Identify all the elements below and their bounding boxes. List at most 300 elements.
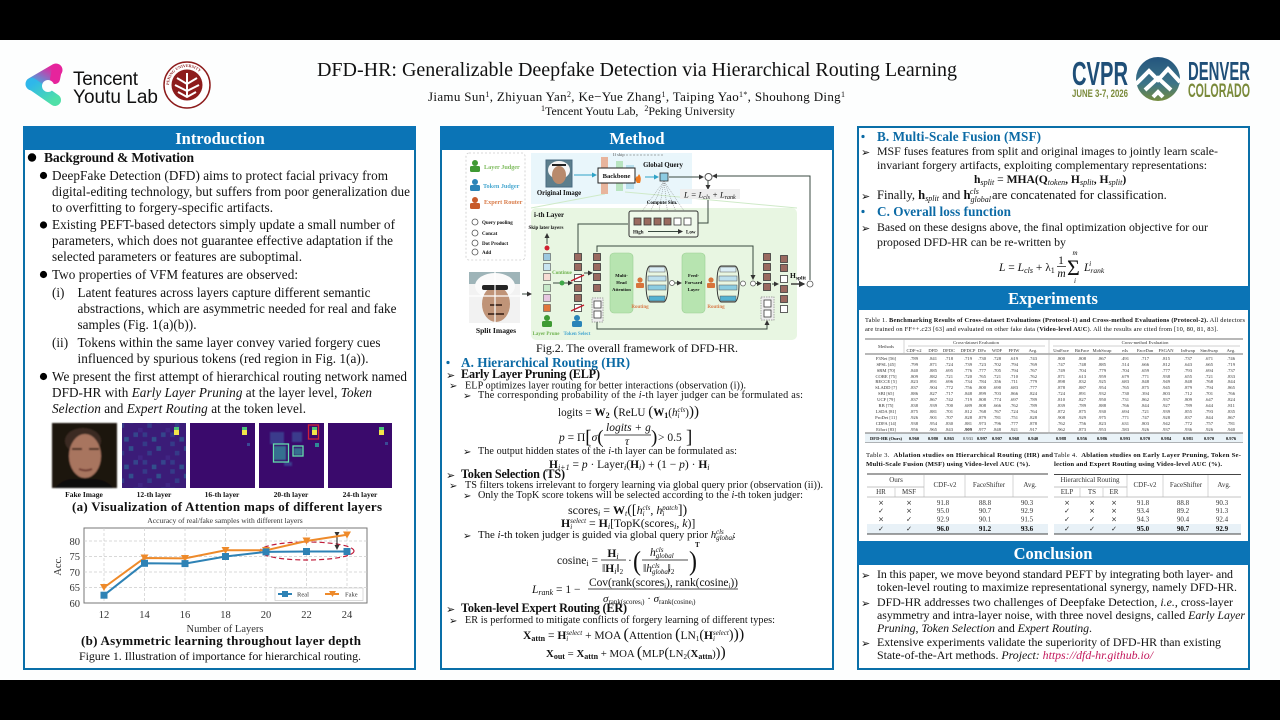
section: B multi-scale fusion: global xyxy=(970,195,992,204)
table 1 benchmark: .950 xyxy=(1098,397,1107,402)
section: B multi-scale fusion xyxy=(861,129,1218,204)
table 1 benchmark: 0.986 xyxy=(1097,436,1108,441)
table 1 benchmark: .742 xyxy=(945,397,954,402)
authors: 1 xyxy=(485,90,489,99)
table 1 benchmark: InSwap xyxy=(1181,348,1196,353)
table 1 benchmark: .768 xyxy=(978,409,987,414)
table 1 benchmark: Avg. xyxy=(1029,348,1037,353)
formula: overall loss: + λ xyxy=(1033,262,1051,274)
formula: cosine: ‖H xyxy=(602,563,614,575)
table 1 benchmark: DFD xyxy=(928,348,938,353)
table 1 benchmark: .723 xyxy=(978,362,987,367)
formula: X attention: select xyxy=(713,629,730,637)
formula: rank loss: ), rank(cosine xyxy=(666,577,729,589)
table 3 HR and MSF ablation: 90.7 xyxy=(979,507,992,515)
formula: cosine: h xyxy=(650,547,656,559)
line chart: accuracy by layer depth: 22 xyxy=(301,610,312,621)
line chart: accuracy by layer depth: 80 xyxy=(70,537,80,548)
authors: , Taiping Yao xyxy=(666,89,739,104)
table 4 ELP TS ER ablation: 93.4 xyxy=(1137,507,1150,515)
table 1 benchmark: .875 xyxy=(1141,385,1150,390)
heatmap: 16th layer xyxy=(190,423,255,488)
diagram: DFD-HR framework xyxy=(466,152,813,340)
table 1 benchmark: .844 xyxy=(1205,415,1214,420)
formula: X out: attn xyxy=(584,652,599,661)
table 1 benchmark: BitFace xyxy=(1075,348,1089,353)
formula: probability: σ xyxy=(592,432,599,444)
table 1 benchmark: .973 xyxy=(978,421,987,426)
formula: total loss xyxy=(680,189,740,201)
table 4 ELP TS ER ablation: ✓ xyxy=(1111,525,1117,533)
logo: Peking University seal: PEKING UNIVERSITY xyxy=(166,64,202,85)
table 1 benchmark: .781 xyxy=(993,415,1002,420)
formula: X attention: attn xyxy=(531,634,546,643)
table 1 benchmark: .909 xyxy=(964,427,973,432)
authors: 2 xyxy=(567,90,571,99)
formula: selected tokens: select xyxy=(570,517,587,525)
table 1 benchmark: .809 xyxy=(910,374,919,379)
formula: X out: )) xyxy=(716,644,726,661)
formula: probability xyxy=(558,422,692,448)
table 1 benchmark: .929 xyxy=(1078,415,1087,420)
table 3 HR and MSF ablation: ✓ xyxy=(878,507,884,515)
table 1 benchmark: .835 xyxy=(1227,409,1236,414)
heading: conclusion: Conclusion xyxy=(1014,544,1092,563)
text block: background and motivation: influenced by spurious tokens (red region in Fig. 1(a)). xyxy=(78,351,368,366)
formula: scores: ([ xyxy=(627,503,637,518)
logo: CVPR 2026 Denver Colorado: JUNE 3-7, 2026 xyxy=(1072,88,1128,100)
affiliations: Peking University xyxy=(648,104,735,118)
panel: method xyxy=(440,126,834,669)
table 1 benchmark: .772 xyxy=(1184,421,1193,426)
table 1 benchmark: .789 xyxy=(1029,403,1038,408)
line chart: accuracy by layer depth: 12 xyxy=(99,610,109,621)
logo: CVPR 2026 Denver Colorado: CVPR xyxy=(1072,56,1128,93)
table 1 benchmark: .710 xyxy=(1010,374,1019,379)
table 1 benchmark: .809 xyxy=(1184,397,1193,402)
table 1 benchmark: .953 xyxy=(1098,427,1107,432)
text block: background and motivation: (ii) xyxy=(52,335,68,350)
formula: cosine: · xyxy=(628,555,632,567)
formula: rank loss: σ xyxy=(654,593,660,605)
table 1 benchmark: .848 xyxy=(1184,379,1193,384)
table 1 benchmark: 0.968 xyxy=(1009,436,1020,441)
table 1 benchmark: .721 xyxy=(945,374,954,379)
table 1 benchmark: .700 xyxy=(945,403,954,408)
table 1 benchmark: .873 xyxy=(1078,427,1087,432)
formula: probability: ] xyxy=(686,427,692,448)
section: B multi-scale fusion: and xyxy=(939,188,963,202)
table 4 ELP TS ER ablation: 91.8 xyxy=(1137,499,1150,507)
formula: cosine: ‖h xyxy=(643,563,652,575)
table 4 ELP TS ER ablation: ✓ xyxy=(1089,525,1095,533)
table 1 benchmark: .739 xyxy=(964,362,973,367)
formula: cosine: i xyxy=(586,559,589,568)
table 1 benchmark: .728 xyxy=(993,356,1002,361)
table 1 benchmark: .812 xyxy=(964,409,973,414)
formula: hidden state: i xyxy=(639,463,641,472)
table 1 benchmark: .799 xyxy=(910,362,919,367)
caption: figure 1a: (a) Visualization of Attention maps of different layers xyxy=(72,499,382,514)
table 1 benchmark: .815 xyxy=(1162,356,1171,361)
table 3 HR and MSF ablation: 96.0 xyxy=(937,525,950,533)
table 1 benchmark: .975 xyxy=(1098,415,1107,420)
table 1 benchmark: .766 xyxy=(1227,391,1236,396)
table 1 benchmark: .789 xyxy=(910,356,919,361)
table 1 benchmark: .921 xyxy=(1010,427,1019,432)
section: B multi-scale fusion: h xyxy=(963,188,970,202)
section: A hierarchical routing: TS filters tokens irrelevant to forgery learning via global query prior (observation (ii)). xyxy=(465,480,823,491)
section: A hierarchical routing: ➢ xyxy=(446,603,455,616)
table 1 benchmark: .827 xyxy=(929,391,938,396)
formula: rank loss: rank xyxy=(538,588,554,597)
layer pruning column xyxy=(529,226,564,337)
table 1 benchmark: .619 xyxy=(1010,356,1019,361)
table 1 benchmark: .977 xyxy=(978,427,987,432)
table 4 ELP TS ER ablation: ✓ xyxy=(1064,525,1070,533)
section: B multi-scale fusion: ➢ xyxy=(861,190,870,203)
diagram: DFD-HR framework: Split Images xyxy=(476,326,516,335)
table 1 benchmark: .838 xyxy=(910,403,919,408)
table 1 benchmark: .712 xyxy=(1184,391,1193,396)
formula: probability: p = Π xyxy=(559,432,585,444)
table 4 ELP TS ER ablation: 92.4 xyxy=(1216,516,1229,524)
caption: figure 1b: (b) Asymmetric learning throughout layer depth xyxy=(81,633,362,648)
table 1 benchmark: RECCE [5] xyxy=(875,379,897,384)
section: B multi-scale fusion: ➢ xyxy=(861,146,870,159)
table 1 benchmark: .697 xyxy=(1010,397,1019,402)
formula: logits: )) xyxy=(689,404,699,420)
table 1 benchmark: .827 xyxy=(1078,397,1087,402)
formula: overall loss: L xyxy=(1084,262,1090,274)
table 1 benchmark: 0.980 xyxy=(928,436,939,441)
formula: probability: ( xyxy=(597,427,604,448)
table 1 benchmark: Methods xyxy=(878,344,894,349)
table 3 HR and MSF ablation: Table 3. Ablation studies on Hierarchical Routing (HR) and xyxy=(866,452,1053,459)
text block: conclusion bullets: token-level routing to maximize representational synergy, namely DFD-HR. xyxy=(877,580,1237,594)
section: B multi-scale fusion: are concatenated for classification. xyxy=(989,188,1167,202)
formula: X attention: select xyxy=(566,629,583,637)
icon: router 2 xyxy=(707,277,715,288)
table 1 benchmark: .949 xyxy=(1162,379,1171,384)
table 1 benchmark: .772 xyxy=(945,385,954,390)
formula: cosine: ‖ xyxy=(616,563,620,575)
table 1 benchmark: .756 xyxy=(964,385,973,390)
table 4 ELP TS ER ablation: × xyxy=(1111,499,1117,507)
line chart: accuracy by layer depth: 60 xyxy=(70,599,80,610)
formula: scores: scores xyxy=(568,503,598,517)
formula: X out: ) xyxy=(712,648,716,660)
table 1 benchmark: 0.984 xyxy=(1161,436,1172,441)
text block: conclusion bullets xyxy=(861,567,1245,662)
table 1 benchmark: .833 xyxy=(1227,374,1236,379)
formula: X attention: ( xyxy=(699,628,704,643)
table 3 HR and MSF ablation: 91.2 xyxy=(979,525,992,533)
table 1 benchmark: .926 xyxy=(1205,427,1214,432)
panel: introduction xyxy=(23,126,416,669)
heading: method: Method xyxy=(610,129,664,148)
text block: background and motivation: (i) xyxy=(52,285,64,300)
table 1 benchmark: .885 xyxy=(929,368,938,373)
table 1 benchmark: .690 xyxy=(993,385,1002,390)
table 1 benchmark: .701 xyxy=(945,409,954,414)
formula: hidden state: ) + (1 − xyxy=(641,459,679,471)
table 3 HR and MSF ablation: 90.1 xyxy=(979,516,992,524)
table 1 benchmark: 0.956 xyxy=(1077,436,1088,441)
table 1 benchmark: .828 xyxy=(1029,415,1038,420)
table 1 benchmark: .771 xyxy=(1141,374,1150,379)
table 1 benchmark: 0.970 xyxy=(1204,436,1215,441)
table 1 benchmark: .781 xyxy=(1227,421,1236,426)
table 1 benchmark: .844 xyxy=(1141,403,1150,408)
block: feed-forward layer: Layer xyxy=(688,287,699,292)
bottom letterbox bar xyxy=(0,680,1280,720)
affiliations: Tencent Youtu Lab, xyxy=(545,104,644,118)
formula: overall loss: Σ xyxy=(1067,255,1080,280)
text block: background and motivation: DFD-HR with Early Layer Pruning at the layer level, Token xyxy=(52,385,372,400)
formula: hidden state: H xyxy=(630,459,639,471)
icon: router 1 xyxy=(636,277,644,288)
table 1 benchmark: .962 xyxy=(1057,427,1066,432)
table 1 benchmark: .830 xyxy=(945,421,954,426)
formula: selected tokens: i xyxy=(674,522,676,531)
table 4 ELP TS ER ablation xyxy=(1054,452,1241,534)
table 1 benchmark: UCF [79] xyxy=(877,397,895,402)
table 1 benchmark: SRM [70] xyxy=(877,368,896,373)
table 4 ELP TS ER ablation: CDF-v2 xyxy=(1134,481,1157,489)
table 1 benchmark: .762 xyxy=(1057,421,1066,426)
heatmap: 24th layer xyxy=(328,423,392,488)
formula: X attention: X xyxy=(523,630,532,642)
table 1 benchmark: .901 xyxy=(929,415,938,420)
table 1 benchmark xyxy=(865,317,1246,442)
table 1 benchmark: .867 xyxy=(1098,356,1107,361)
affiliations: 1 xyxy=(541,104,545,113)
diagram: DFD-HR framework: Compute Sim. xyxy=(647,201,678,206)
table 1 benchmark: .938 xyxy=(1162,374,1171,379)
table 1 benchmark: .839 xyxy=(1057,403,1066,408)
formula: logits: ReLU (W xyxy=(618,404,664,420)
formula: h split: split xyxy=(1109,178,1123,187)
legend: diagram symbols: Query pooling xyxy=(482,221,513,226)
table 1 benchmark: .878 xyxy=(1057,385,1066,390)
section: A hierarchical routing: ➢ xyxy=(449,381,457,392)
table 4 ELP TS ER ablation: × xyxy=(1089,499,1095,507)
table 1 benchmark: .848 xyxy=(964,391,973,396)
table 1 benchmark: .694 xyxy=(1121,409,1130,414)
text block: background and motivation: Existing PEFT-based detectors simply update a small number of xyxy=(52,217,396,232)
formula: logits: logits = W xyxy=(558,407,606,419)
table 1 benchmark: FFIW xyxy=(1009,348,1020,353)
table 1 benchmark: .779 xyxy=(1029,379,1038,384)
formula: rank loss: ) xyxy=(693,598,696,606)
table 1 benchmark: .647 xyxy=(1205,397,1214,402)
formula: cosine: 2 xyxy=(671,568,675,576)
formula: selected tokens: H xyxy=(599,516,608,530)
table 1 benchmark: .695 xyxy=(945,368,954,373)
table 1 benchmark: .705 xyxy=(993,368,1002,373)
table 1 benchmark: .937 xyxy=(1162,427,1171,432)
line chart: accuracy by layer depth: 18 xyxy=(220,610,231,621)
table 4 ELP TS ER ablation: ✓ xyxy=(1089,516,1095,524)
block: multi-head attention xyxy=(610,253,633,313)
line chart: accuracy by layer depth: 24 xyxy=(342,610,353,621)
table 1 benchmark: .810 xyxy=(1057,397,1066,402)
table 4 ELP TS ER ablation: Hierarchical Routing xyxy=(1061,476,1120,484)
table 1 benchmark: .631 xyxy=(1121,421,1130,426)
table 1 benchmark: .887 xyxy=(1078,385,1087,390)
formula: h split: , H xyxy=(1094,173,1109,186)
table 1 benchmark: .855 xyxy=(1184,409,1193,414)
table 1 benchmark: .730 xyxy=(1121,391,1130,396)
authors: 1* xyxy=(739,90,747,99)
table 1 benchmark: .898 xyxy=(1057,379,1066,384)
formula: X out: out xyxy=(554,652,565,661)
formula: probability: logits + g xyxy=(606,422,651,434)
table 1 benchmark: F3Net [56] xyxy=(876,356,897,361)
figure: attention maps row xyxy=(52,423,392,499)
text block: background and motivation: abstractions, which are asymmetric needed for real and fake xyxy=(78,301,397,316)
formula: cosine: = xyxy=(589,555,598,567)
table 1 benchmark: .875 xyxy=(1078,409,1087,414)
table 4 ELP TS ER ablation: 91.3 xyxy=(1216,507,1229,515)
table 4 ELP TS ER ablation: Avg. xyxy=(1217,481,1231,489)
formula: logits: cls xyxy=(678,406,686,414)
table 1 benchmark: .871 xyxy=(1057,374,1066,379)
formula: total loss: rank xyxy=(725,195,736,201)
formula: rank loss: = 1 − xyxy=(553,584,580,596)
expert stack 1 xyxy=(646,266,668,302)
table 3 HR and MSF ablation: MSF xyxy=(902,488,916,496)
table 4 ELP TS ER ablation: ✓ xyxy=(1064,516,1070,524)
table 1 benchmark: .666 xyxy=(1141,362,1150,367)
icon: layer judger xyxy=(470,160,480,172)
formula: cosine: i xyxy=(616,552,619,561)
formula: cosine: i xyxy=(614,567,616,576)
table 1 benchmark: .779 xyxy=(1098,368,1107,373)
table 3 HR and MSF ablation: × xyxy=(878,499,884,507)
table 1 benchmark: .881 xyxy=(964,421,973,426)
table 1 benchmark: .879 xyxy=(1184,385,1193,390)
table 1 benchmark: .767 xyxy=(1029,368,1038,373)
line chart: accuracy by layer depth: 75 xyxy=(70,552,80,563)
table 1 benchmark: .793 xyxy=(1184,368,1193,373)
table 1 benchmark: .866 xyxy=(1010,391,1019,396)
table 1 benchmark: .843 xyxy=(945,427,954,432)
table 3 HR and MSF ablation: 92.9 xyxy=(1021,507,1034,515)
table 1 benchmark: .394 xyxy=(1141,391,1150,396)
table 1 benchmark: .936 xyxy=(1184,427,1193,432)
table 1 benchmark: .671 xyxy=(1205,356,1214,361)
section: A hierarchical routing: cls xyxy=(716,528,724,536)
block: feed-forward layer: Feed- xyxy=(688,273,699,278)
formula: h split: = xyxy=(994,173,1007,186)
diagram: DFD-HR framework: split xyxy=(796,276,806,282)
diagram: DFD-HR framework: Original Image xyxy=(537,190,581,197)
table 1 benchmark: .867 xyxy=(1227,415,1236,420)
section: A hierarchical routing: The corresponding probability of the i-th layer judger can be formulated as: xyxy=(478,390,803,401)
formula: X out: ( xyxy=(687,648,691,660)
formula: rank loss: rank(scores xyxy=(608,598,641,606)
table 1 benchmark: .356 xyxy=(993,379,1002,384)
formula: cosine: ( xyxy=(633,546,641,576)
table 3 HR and MSF ablation: 90.3 xyxy=(1021,499,1034,507)
text block: background and motivation: Two properties of VFM features are observed: xyxy=(52,267,298,282)
text block: background and motivation: to overfitting to forgery-specific artifacts. xyxy=(52,200,273,215)
token ranking box: High xyxy=(633,230,644,236)
formula: scores: t xyxy=(625,509,628,518)
table 1 benchmark: .789 xyxy=(1078,403,1087,408)
table 3 HR and MSF ablation: 93.6 xyxy=(1021,525,1034,533)
formula: rank loss: i xyxy=(728,582,730,590)
section: A hierarchical routing: Only the TopK score tokens will be selected according to the i-th token judger: xyxy=(478,490,803,501)
table 1 benchmark: .724 xyxy=(945,362,954,367)
section: B multi-scale fusion: Finally, h xyxy=(877,188,925,202)
layer pruning column: Layer Prune xyxy=(532,332,560,337)
formula: rank loss: i xyxy=(692,602,694,607)
table 3 HR and MSF ablation: Multi-Scale Fusion (MSF) using Video-level AUC (%). xyxy=(866,461,1030,468)
table 1 benchmark: Cross-method Evaluation xyxy=(1122,340,1169,345)
table 1 benchmark: .696 xyxy=(945,379,954,384)
section: A hierarchical routing: : xyxy=(733,529,736,541)
expert stack 2 xyxy=(717,266,739,302)
section: B multi-scale fusion: B. Multi-Scale Fusion (MSF) xyxy=(877,129,1041,144)
section: A hierarchical routing: Token-level Expert Routing (ER) xyxy=(461,601,627,615)
formula: X out: + MOA xyxy=(598,648,637,660)
section: C overall loss function: ➢ xyxy=(861,222,870,235)
table 1 benchmark: .965 xyxy=(929,427,938,432)
table 1 benchmark: .930 xyxy=(1098,409,1107,414)
table 1 benchmark: .882 xyxy=(929,374,938,379)
formula: logits: i xyxy=(678,412,680,420)
table 1 benchmark: .734 xyxy=(964,379,973,384)
table 1 benchmark: .765 xyxy=(978,374,987,379)
heatmap: 12th layer xyxy=(122,423,186,488)
table 4 ELP TS ER ablation: × xyxy=(1089,507,1095,515)
formula: h split: token xyxy=(1048,178,1065,187)
formula: X out: X xyxy=(576,648,584,660)
table 1 benchmark: .800 xyxy=(978,385,987,390)
table 1 benchmark: .731 xyxy=(1121,397,1130,402)
table 1 benchmark: .899 xyxy=(978,391,987,396)
diagram: DFD-HR framework: Routing xyxy=(707,305,725,310)
icon: token judger xyxy=(470,179,480,191)
authors: , Ke−Yue Zhang xyxy=(571,89,662,104)
table 1 benchmark: .718 xyxy=(945,356,954,361)
formula: logits: ) xyxy=(685,407,689,419)
table 1 benchmark: .766 xyxy=(1121,403,1130,408)
formula: hidden state: i xyxy=(707,463,710,472)
text block: conclusion bullets: ➢ xyxy=(861,597,870,610)
table 1 benchmark: .514 xyxy=(1121,362,1130,367)
formula: X attention: )) xyxy=(734,626,744,643)
table 1 benchmark: .794 xyxy=(1010,368,1019,373)
table 1 benchmark: .808 xyxy=(1078,356,1087,361)
table 3 HR and MSF ablation: ✓ xyxy=(878,525,884,533)
formula: rank loss: L xyxy=(531,584,538,596)
table 4 ELP TS ER ablation: 95.0 xyxy=(1137,525,1150,533)
table 1 benchmark: .737 xyxy=(1227,368,1236,373)
table 1 benchmark: .777 xyxy=(1010,421,1019,426)
table 1 benchmark: .888 xyxy=(1098,403,1107,408)
table 3 HR and MSF ablation: HR xyxy=(876,488,886,496)
block: multi-head attention: Head xyxy=(616,280,627,285)
affiliations: 2 xyxy=(644,104,648,113)
logo: CVPR 2026 Denver Colorado xyxy=(1072,56,1250,102)
table 1 benchmark: .848 xyxy=(1141,379,1150,384)
diagram: DFD-HR framework: i-th Layer xyxy=(534,211,564,219)
table 3 HR and MSF ablation: 95.0 xyxy=(937,507,950,515)
